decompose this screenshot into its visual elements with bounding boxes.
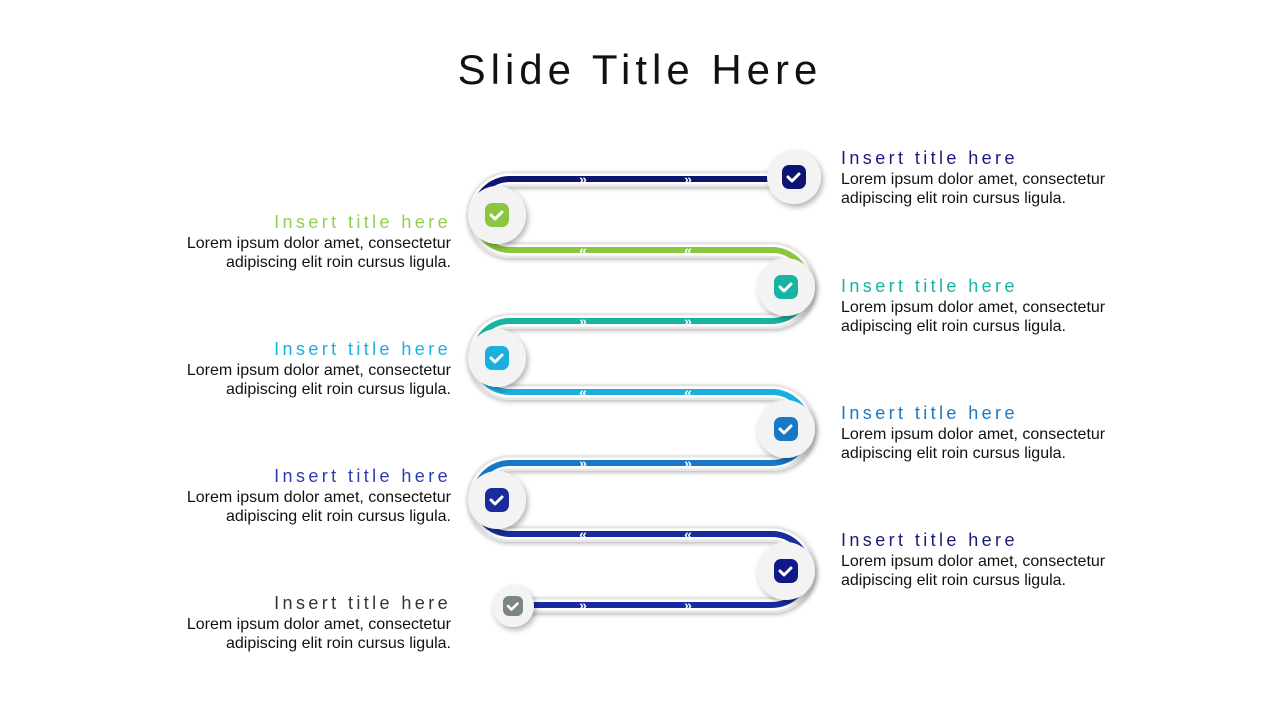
- text block: left 1: adipiscing elit roin cursus ligula.: [226, 254, 451, 271]
- chevron arrows: »: [579, 597, 587, 613]
- chevron arrows: «: [684, 526, 692, 542]
- icon: check 7: [757, 542, 815, 600]
- text block: right 3: Insert title here: [841, 403, 1018, 423]
- text block: left 3: Lorem ipsum dolor amet, consectetur: [187, 489, 451, 506]
- text block: left 1: Lorem ipsum dolor amet, consectetur: [187, 235, 451, 252]
- icon: check 6: [468, 471, 526, 529]
- text block: right 3: adipiscing elit roin cursus ligula.: [841, 445, 1066, 462]
- chevron arrows: »: [684, 313, 692, 329]
- icon: check 5: [757, 400, 815, 458]
- text block: left 1: Insert title here: [274, 212, 451, 232]
- text block: left 3: [187, 466, 451, 525]
- icon: check 1: [767, 150, 821, 204]
- chevron arrows: »: [684, 455, 692, 471]
- colored segments: [474, 179, 808, 605]
- chevron arrows: »: [684, 597, 692, 613]
- text block: right 2: Lorem ipsum dolor amet, consectetur: [841, 299, 1105, 316]
- text block: right 3: [841, 403, 1105, 462]
- chevron arrows: »: [579, 455, 587, 471]
- text block: left 3: Insert title here: [274, 466, 451, 486]
- text block: right 1: [841, 148, 1105, 207]
- icon: check 4: [468, 329, 526, 387]
- chevron arrows: [579, 171, 692, 613]
- chevron arrows: «: [579, 242, 587, 258]
- chevron arrows: «: [684, 384, 692, 400]
- text block: left 2: Insert title here: [274, 339, 451, 359]
- text block: right 4: Insert title here: [841, 530, 1018, 550]
- text block: right 2: adipiscing elit roin cursus ligula.: [841, 318, 1066, 335]
- text block: right 1: adipiscing elit roin cursus ligula.: [841, 190, 1066, 207]
- track outline: [474, 179, 808, 605]
- text block: left 1: [187, 212, 451, 271]
- chevron arrows: «: [684, 242, 692, 258]
- icon: check 2: [468, 186, 526, 244]
- icon: check 8: [492, 585, 534, 627]
- text block: right 2: [841, 276, 1105, 335]
- chevron arrows: »: [684, 171, 692, 187]
- text block: right 2: Insert title here: [841, 276, 1018, 296]
- text block: right 4: Lorem ipsum dolor amet, consectetur: [841, 553, 1105, 570]
- chevron arrows: «: [579, 384, 587, 400]
- text block: left 3: adipiscing elit roin cursus ligula.: [226, 508, 451, 525]
- chevron arrows: «: [579, 526, 587, 542]
- chevron arrows: »: [579, 313, 587, 329]
- text block: left 4: Lorem ipsum dolor amet, consectetur: [187, 616, 451, 633]
- text block: right 3: Lorem ipsum dolor amet, consectetur: [841, 426, 1105, 443]
- text block: left 4: Insert title here: [274, 593, 451, 613]
- text block: right 4: adipiscing elit roin cursus ligula.: [841, 572, 1066, 589]
- text block: left 4: [187, 593, 451, 652]
- text block: right 1: Insert title here: [841, 148, 1018, 168]
- title: Slide Title Here: [458, 46, 822, 93]
- text block: left 2: adipiscing elit roin cursus ligula.: [226, 381, 451, 398]
- chevron arrows: »: [579, 171, 587, 187]
- text block: right 4: [841, 530, 1105, 589]
- text block: left 2: Lorem ipsum dolor amet, consectetur: [187, 362, 451, 379]
- text block: right 1: Lorem ipsum dolor amet, consectetur: [841, 171, 1105, 188]
- icon: check 3: [757, 258, 815, 316]
- text block: left 4: adipiscing elit roin cursus ligula.: [226, 635, 451, 652]
- text block: left 2: [187, 339, 451, 398]
